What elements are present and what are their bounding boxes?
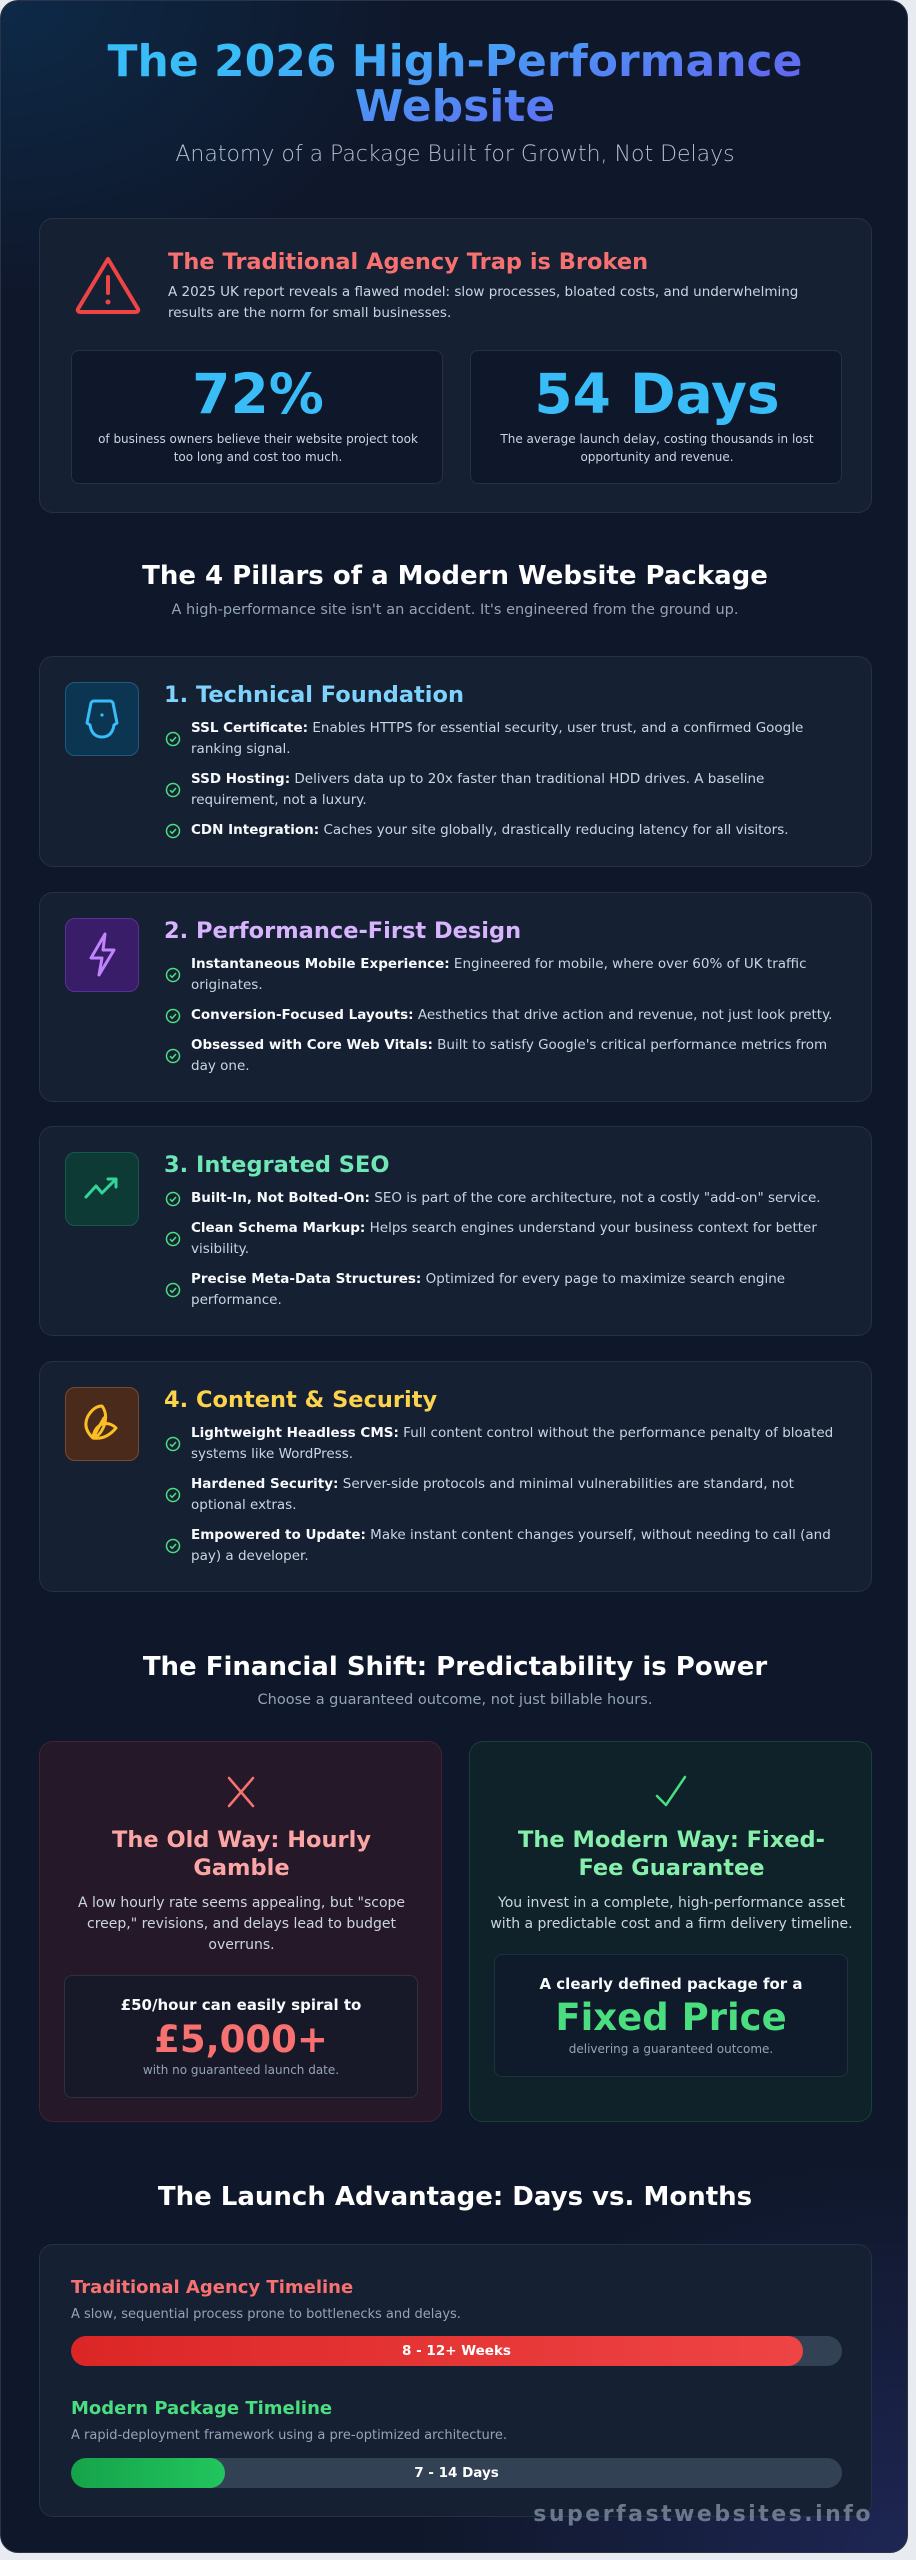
bullets: SSD Hosting: Delivers data up to 20x faster than traditional HDD drives. A baseline requirement, not a luxury.	[191, 771, 764, 808]
stat: 72%: of business owners believe their website project took too long and cost too much.	[98, 432, 418, 464]
pillar title: 3. Integrated SEO	[164, 1152, 389, 1178]
subheading: financial: Choose a guaranteed outcome, not just billable hours.	[258, 1692, 652, 1708]
bar: modern: 7 - 14 Days	[414, 2465, 499, 2481]
desc: traditional: A slow, sequential process prone to bottlenecks and delays.	[71, 2307, 461, 2322]
pillar title: 1. Technical Foundation	[164, 682, 464, 708]
icon: check	[656, 1776, 686, 1806]
panel: old way	[39, 1741, 442, 2122]
bar: traditional	[71, 2336, 842, 2366]
bullets: Empowered to Update: Make instant content changes yourself, without needing to call (and pay) a developer.	[191, 1527, 831, 1564]
bullets: Lightweight Headless CMS: Full content control without the performance penalty of bloated systems like WordPress.	[191, 1425, 833, 1462]
label: modern: Modern Package Timeline	[71, 2398, 332, 2419]
subtitle: Anatomy of a Package Built for Growth, Not Delays	[175, 142, 735, 167]
pillar title: 4. Content & Security	[164, 1387, 437, 1413]
bar: modern	[71, 2458, 842, 2488]
icon: lightning	[65, 918, 139, 992]
callout: cost	[64, 1975, 418, 2098]
card title: The Old Way: Hourly Gamble	[112, 1827, 371, 1881]
callout: fixed price: A clearly defined package for a	[539, 1975, 803, 1993]
subheading: pillars: A high-performance site isn't an accident. It's engineered from the ground up.	[172, 602, 738, 618]
card body: A low hourly rate seems appealing, but "scope creep," revisions, and delays lead to budget overruns.	[78, 1895, 405, 1953]
callout: cost: with no guaranteed launch date.	[143, 2063, 339, 2077]
bullets: Instantaneous Mobile Experience: Engineered for mobile, where over 60% of UK traffic originates.	[191, 956, 807, 993]
callout: fixed price	[494, 1954, 848, 2077]
panel: pillar 3	[39, 1126, 872, 1336]
card body: You invest in a complete, high-performance asset with a predictable cost and a firm delivery timeline.	[490, 1895, 853, 1932]
bullets: Obsessed with Core Web Vitals: Built to satisfy Google's critical performance metrics from day one.	[191, 1037, 827, 1074]
stat: 72%	[71, 350, 443, 484]
callout: fixed price: Fixed Price	[555, 1996, 787, 2039]
title: The 2026 High-Performance	[108, 36, 802, 87]
text: trap body: A 2025 UK report reveals a flawed model: slow processes, bloated costs, and underwhelming results are the norm for small businesses.	[168, 284, 798, 321]
icon: warning triangle	[76, 256, 140, 314]
bullets: Conversion-Focused Layouts: Aesthetics that drive action and revenue, not just look pretty.	[191, 1007, 832, 1023]
bullets: Built-In, Not Bolted-On: SEO is part of the core architecture, not a costly "add-on" service.	[191, 1190, 821, 1206]
heading: financial shift: The Financial Shift: Predictability is Power	[143, 1652, 767, 1682]
title: Website	[355, 81, 555, 132]
heading: 4 pillars: The 4 Pillars of a Modern Website Package	[142, 561, 768, 591]
bullets: CDN Integration: Caches your site globally, drastically reducing latency for all visitors.	[191, 822, 789, 838]
icon: cross	[228, 1776, 254, 1808]
card title: The Modern Way: Fixed-Fee Guarantee	[518, 1827, 825, 1881]
label: traditional: Traditional Agency Timeline	[71, 2277, 353, 2298]
panel: agency trap	[39, 218, 872, 513]
panel: pillar 2	[39, 892, 872, 1102]
icon: trend	[65, 1152, 139, 1226]
pillar title: 2. Performance-First Design	[164, 918, 521, 944]
callout: fixed price: delivering a guaranteed outcome.	[569, 2042, 773, 2056]
callout: cost: £5,000+	[154, 2018, 328, 2061]
icon: technical	[65, 682, 139, 756]
panel: timelines	[39, 2244, 872, 2517]
bullets: Hardened Security: Server-side protocols and minimal vulnerabilities are standard, not optional extras.	[191, 1476, 794, 1513]
desc: modern: A rapid-deployment framework using a pre-optimized architecture.	[71, 2428, 507, 2443]
title	[105, 39, 805, 129]
stat: 54 days: 54 Days	[534, 362, 780, 426]
bullets	[166, 1425, 833, 1564]
watermark: superfastwebsites.info	[533, 2502, 873, 2527]
stat: 54 days	[470, 350, 842, 484]
heading: trap: The Traditional Agency Trap is Broken	[168, 249, 648, 275]
panel: pillar 4	[39, 1361, 872, 1592]
panel: modern way	[469, 1741, 872, 2122]
callout: cost: £50/hour can easily spiral to	[121, 1996, 361, 2014]
bullets: SSL Certificate: Enables HTTPS for essential security, user trust, and a confirmed Google ranking signal.	[191, 720, 803, 757]
bullets	[166, 1190, 821, 1308]
bullets	[166, 720, 803, 838]
stat: 72%: 72%	[192, 362, 324, 426]
heading: launch advantage: The Launch Advantage: Days vs. Months	[158, 2182, 752, 2212]
bullets: Clean Schema Markup: Helps search engines understand your business context for better visibility.	[191, 1220, 817, 1257]
bar: traditional: 8 - 12+ Weeks	[402, 2343, 511, 2359]
bullets: Precise Meta-Data Structures: Optimized for every page to maximize search engine performance.	[191, 1271, 785, 1308]
stat: 54 days: The average launch delay, costing thousands in lost opportunity and revenue.	[500, 432, 814, 464]
bullets	[166, 956, 832, 1074]
icon: leaves	[65, 1387, 139, 1461]
panel: pillar 1	[39, 656, 872, 867]
